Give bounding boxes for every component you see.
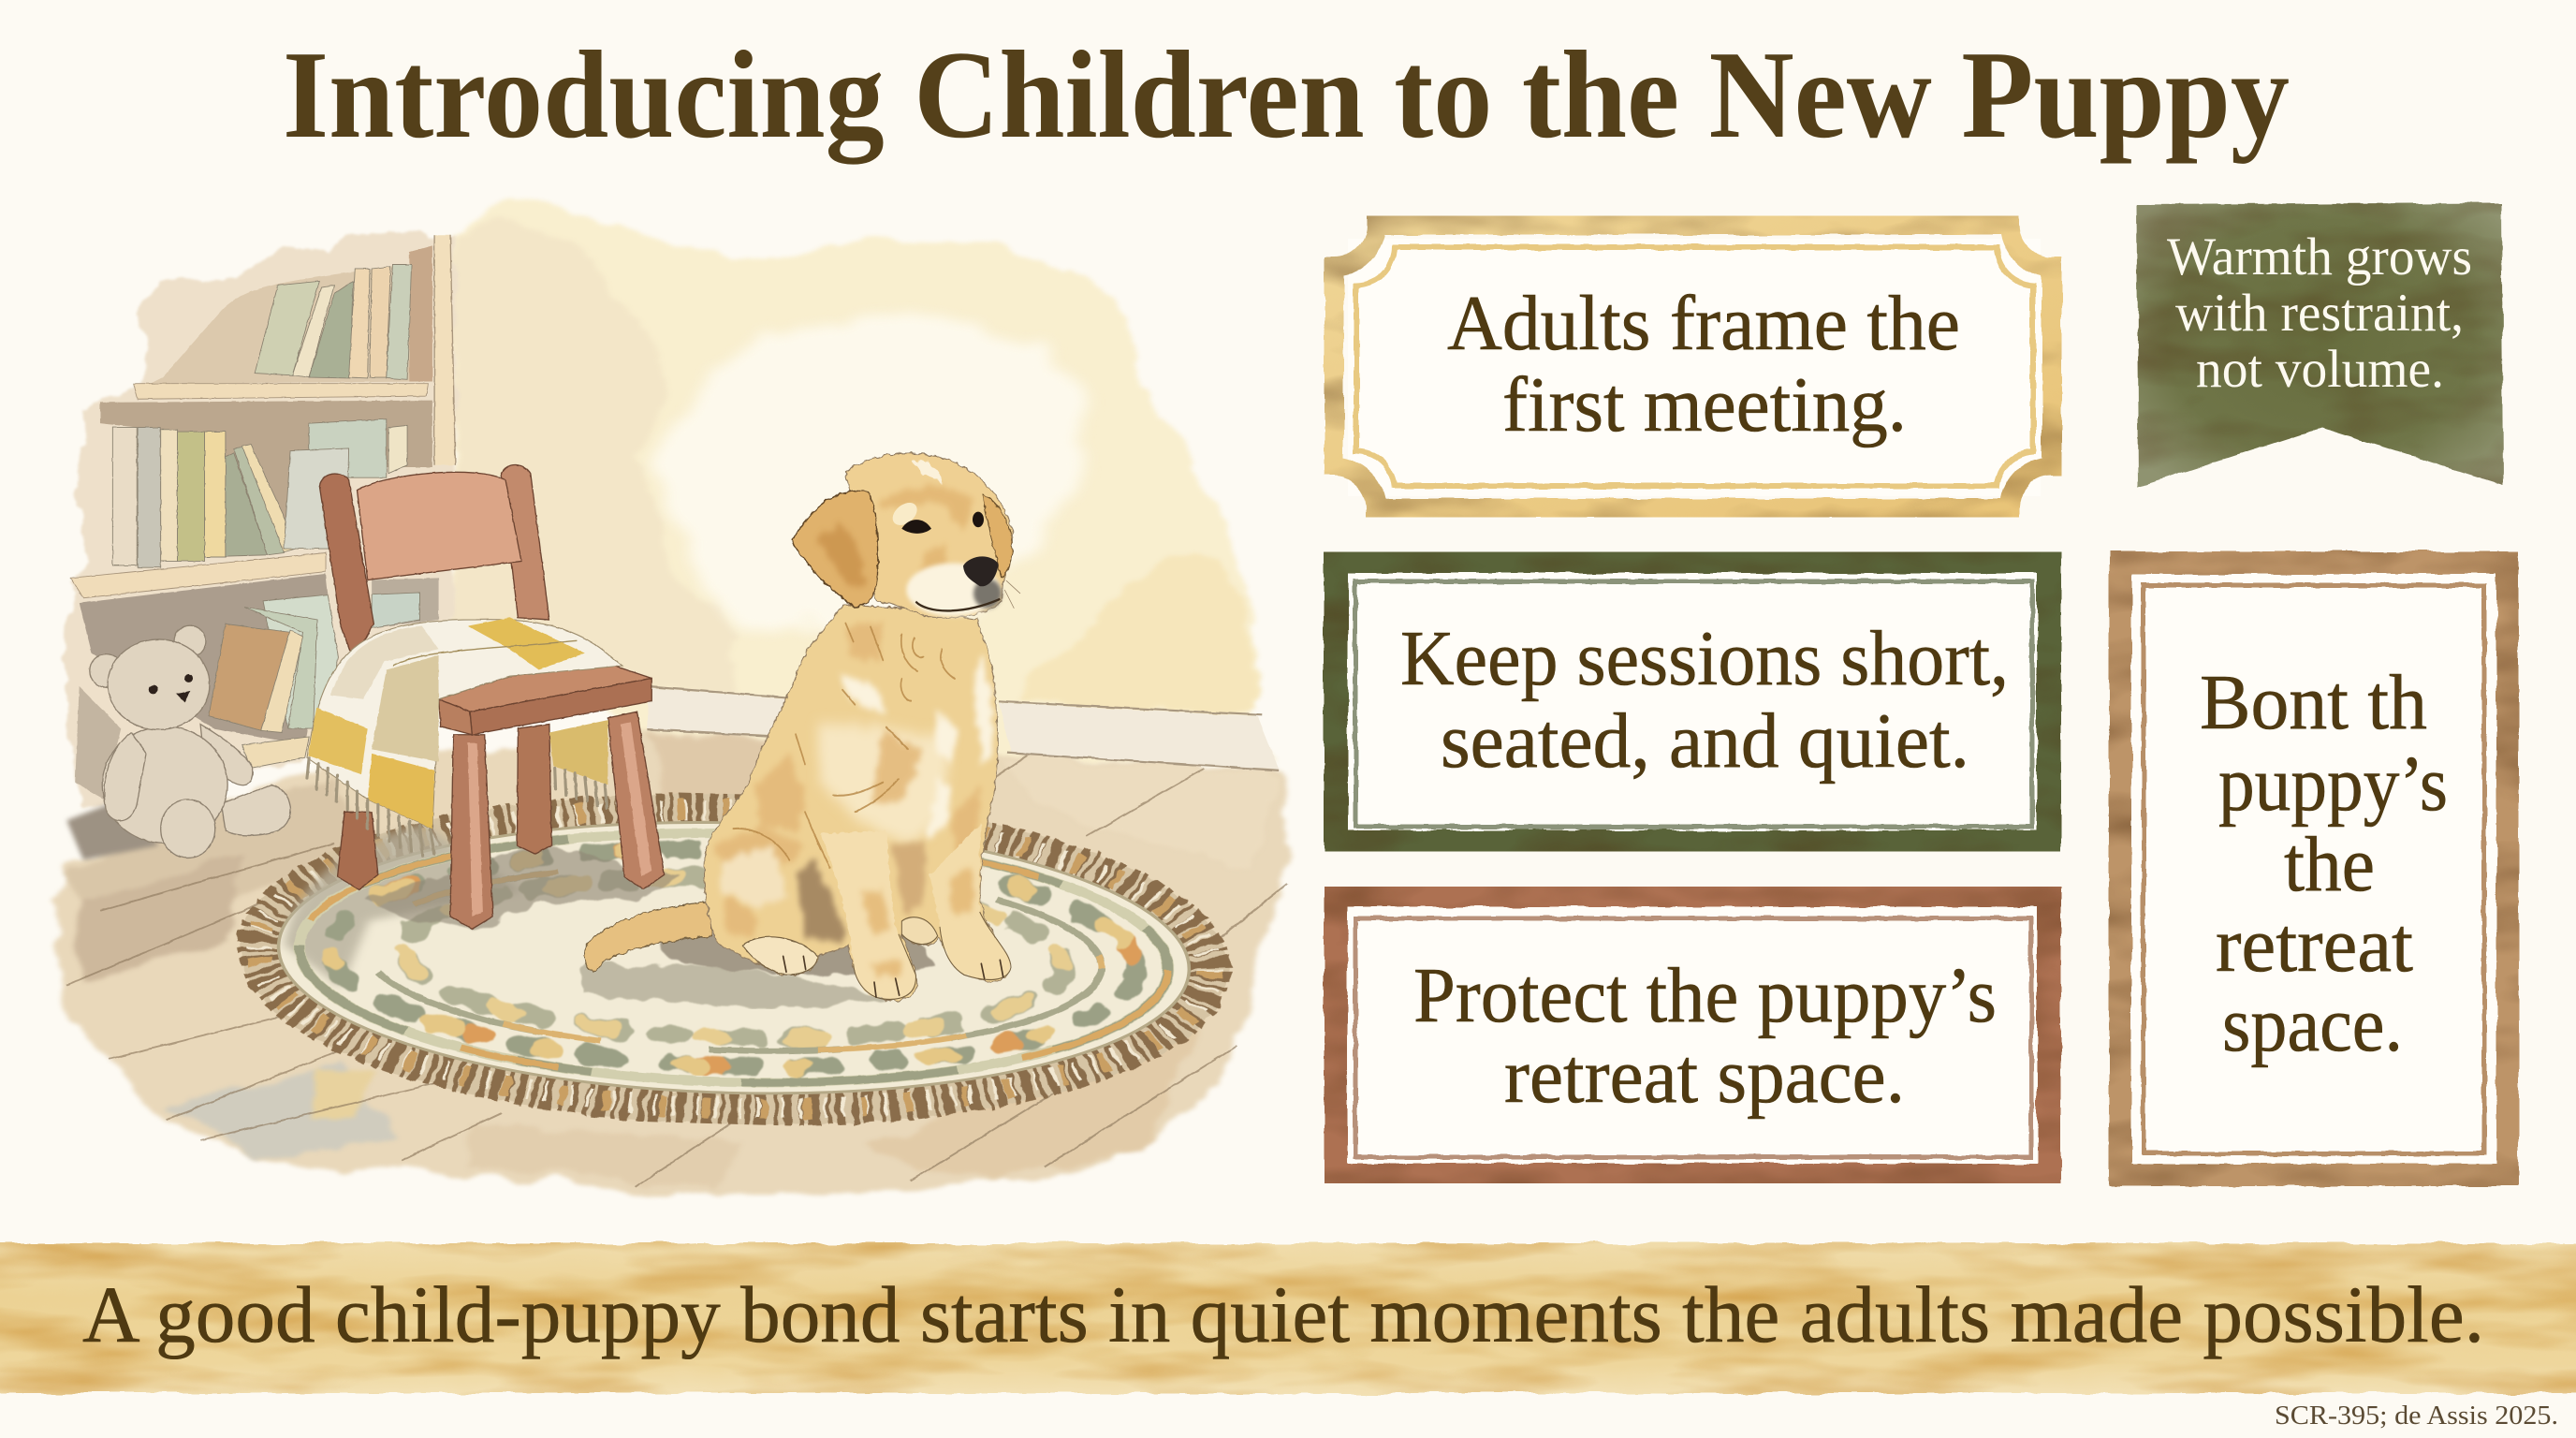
seat side: [439, 699, 472, 735]
band text: A good child-puppy bond starts in quiet moments the adults made possible.: [82, 1269, 2484, 1359]
rug disc: [272, 810, 1195, 1106]
teddy left arm: [105, 733, 146, 821]
chair right post: [502, 464, 549, 620]
shelf wash: [63, 232, 455, 808]
card text: Adults frame the: [1447, 280, 1960, 367]
panel: warmth ribbon: [2137, 202, 2503, 487]
shelf layer: bookshelf, teddy, chair, blanket: [63, 232, 665, 929]
card text: Bont th: [2200, 659, 2427, 746]
floor wash: [57, 728, 1288, 1195]
card text: [2200, 659, 2448, 1068]
puppy toes: [783, 957, 1003, 997]
card text: the: [2284, 821, 2375, 908]
puppy far paw: [901, 917, 938, 945]
puppy haunch light: [721, 845, 789, 908]
baseboard: [648, 686, 1279, 770]
puppy tail: [584, 901, 711, 971]
puppy ear right: [983, 493, 1013, 577]
tan frame outer: [2120, 563, 2508, 1175]
brown card interior: [1348, 906, 2037, 1164]
blanket fringe: [307, 757, 607, 856]
gold card interior: [1348, 239, 2041, 496]
panel: adults frame the first meeting: [1334, 225, 2052, 508]
chair back leg left: [338, 812, 378, 889]
puppy body: [704, 605, 1010, 1001]
teddy floor shadow: [66, 800, 158, 860]
teddy right arm: [200, 725, 253, 785]
card text: Protect the puppy’s: [1413, 952, 1997, 1039]
floor planks: [66, 756, 1287, 1187]
card text: Keep sessions short,: [1400, 615, 2009, 702]
puppy front leg right: [929, 823, 1011, 979]
ribbon text: [2167, 227, 2472, 399]
teddy face: [149, 674, 193, 702]
takeaway band: [0, 1243, 2576, 1393]
panel: keep sessions short: [1336, 561, 2049, 843]
blanket bands: [308, 618, 585, 829]
tan frame inner: [2144, 585, 2484, 1153]
blanket body: [307, 620, 622, 829]
puppy head: [845, 453, 1013, 618]
chair back leg right: [518, 725, 551, 854]
gold frame outer: [1334, 225, 2052, 508]
puppy fur strokes: [733, 624, 955, 868]
puppy: [584, 453, 1020, 1001]
puppy brow highlight: [889, 498, 920, 530]
teddy ears: [90, 625, 206, 687]
teddy head: [108, 639, 210, 729]
puppy belly shadow: [796, 860, 845, 944]
shelf shadows: [71, 235, 455, 745]
puppy haunch paw: [742, 937, 817, 975]
puppy whiskers: [1004, 580, 1020, 609]
chair leg highlights: [468, 722, 651, 917]
ribbon text: Warmth grows: [2167, 227, 2472, 286]
green frame outer: [1336, 561, 2049, 843]
rug motifs: [327, 839, 1141, 1078]
gold frame inner: [1356, 247, 2033, 486]
puppy right eye: [973, 512, 984, 527]
card text: [1447, 280, 1960, 448]
teddy wall shadow: [75, 686, 121, 800]
puppy left eye: [901, 520, 931, 534]
rug outer band: [294, 822, 1174, 1094]
books: [112, 265, 419, 768]
chair front leg right: [607, 712, 665, 889]
panel: tall card: [2120, 563, 2508, 1175]
rug fringe: [251, 796, 1216, 1123]
card text: space.: [2222, 981, 2403, 1068]
puppy torso light: [817, 723, 948, 845]
puppy shade patches: [714, 624, 980, 938]
ribbon shape: [2137, 202, 2503, 487]
puppy ear left: [793, 492, 878, 608]
puppy muzzle: [906, 564, 1000, 617]
seat top: [439, 666, 651, 712]
puppy ear shade: [817, 523, 866, 590]
blanket: [307, 618, 622, 856]
teddy leg: [221, 785, 290, 835]
panel: protect the retreat space: [1336, 895, 2049, 1175]
puppy mouth: [915, 599, 1000, 610]
puppy front leg left: [821, 830, 915, 999]
ribbon text: with restraint,: [2175, 284, 2464, 343]
band wash: [0, 1243, 2576, 1393]
teddy bear: [75, 625, 290, 858]
chair back rest: [358, 472, 521, 580]
rug left shade: [283, 820, 524, 992]
puppy head shade: [877, 486, 973, 582]
brown frame outer: [1336, 895, 2049, 1175]
card text: first meeting.: [1502, 361, 1907, 448]
room layer: wall, floor and rug: [57, 206, 1288, 1195]
puppy blaze: [911, 461, 943, 484]
card text: [1413, 952, 1997, 1120]
floor shading: [59, 732, 1279, 1187]
rug lower shadow: [585, 963, 886, 1006]
card text: retreat: [2216, 902, 2413, 989]
title: Introducing Children to the New Puppy: [283, 25, 2290, 165]
puppy face: [901, 512, 1020, 610]
chair shadow: [368, 844, 677, 931]
card text: retreat space.: [1504, 1033, 1905, 1120]
chair left post: [319, 474, 373, 659]
bookshelf: [63, 232, 455, 808]
seat front: [470, 678, 651, 735]
hanging blanket: [549, 720, 607, 785]
rug centre shadow: [657, 911, 936, 976]
puppy leg shading: [861, 868, 973, 976]
puppy chin shade: [973, 579, 1002, 609]
chair front leg left: [450, 735, 493, 929]
tan card interior: [2130, 573, 2497, 1165]
puppy nose: [963, 556, 999, 586]
puppy leg outlines: [854, 912, 1011, 999]
puppy inner shadow: [892, 842, 927, 912]
illustration: puppy in a quiet room: [57, 206, 1288, 1195]
wall wash: [451, 206, 1279, 769]
citation: SCR-395; de Assis 2025.: [2275, 1401, 2558, 1431]
chair: [319, 464, 665, 929]
card text: puppy’s: [2218, 741, 2448, 828]
puppy chest highlights: [836, 653, 992, 838]
card text: seated, and quiet.: [1441, 697, 1969, 785]
teddy foot: [161, 800, 215, 858]
rug inner ring: [362, 855, 1105, 1061]
rug: [251, 796, 1216, 1123]
card text: [1400, 615, 2009, 785]
green frame inner: [1355, 581, 2032, 827]
teddy body: [102, 726, 227, 844]
ribbon text: not volume.: [2196, 340, 2444, 399]
brown frame inner: [1355, 918, 2031, 1157]
green card interior: [1348, 571, 2037, 833]
